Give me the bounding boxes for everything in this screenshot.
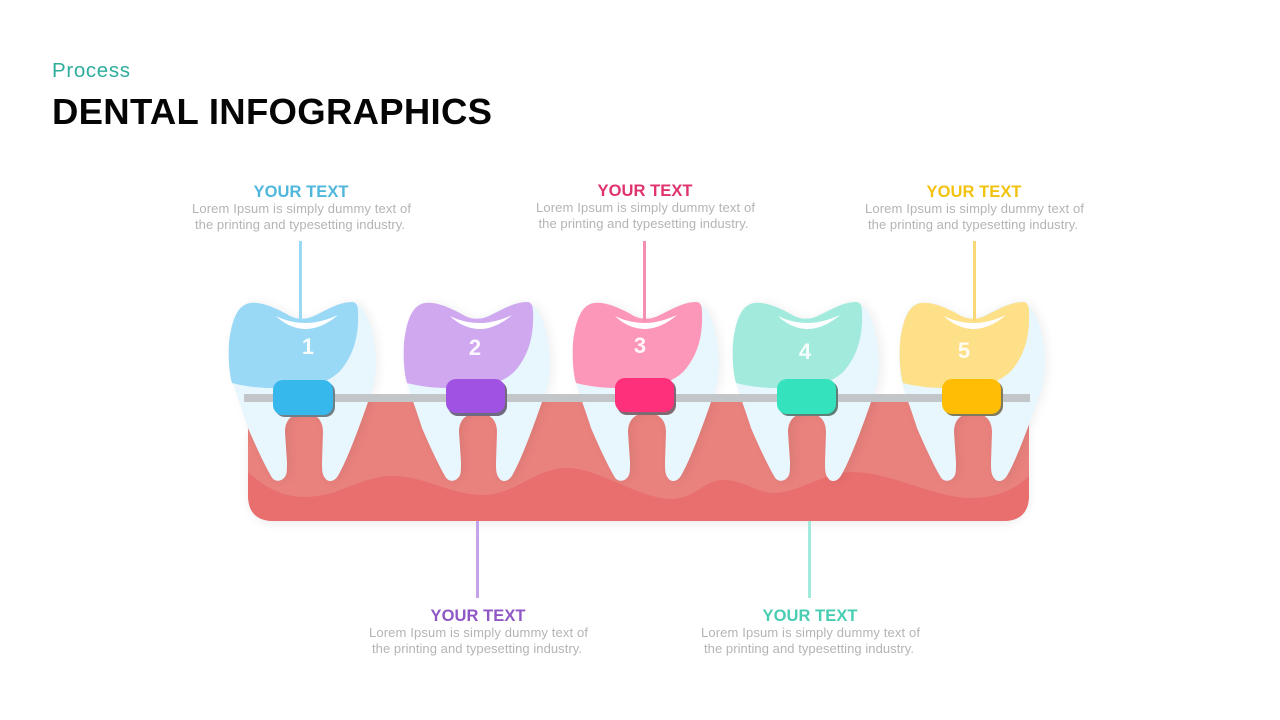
callout: top right: YOUR TEXT — [926, 183, 1022, 201]
callout: top middle — [536, 182, 755, 231]
callout: bottom right: Lorem Ipsum is simply dummy text of — [701, 625, 920, 640]
tooth 4 — [733, 302, 883, 481]
tooth 4: 4 — [799, 339, 812, 364]
bracket 4 — [777, 379, 838, 416]
tooth 5: 5 — [958, 338, 970, 363]
title: DENTAL INFOGRAPHICS — [52, 91, 492, 132]
tooth 1 — [229, 302, 379, 481]
callout: top left: YOUR TEXT — [254, 183, 348, 201]
callout: bottom left: the printing and typesetting industry. — [372, 641, 582, 656]
callout: top left: the printing and typesetting industry. — [195, 217, 405, 232]
tooth 1: 1 — [302, 334, 314, 359]
tooth 3: 3 — [634, 333, 646, 358]
bracket 3 — [615, 378, 676, 415]
wire — [244, 394, 1030, 402]
tooth 3 — [573, 302, 722, 481]
callout: bottom right: YOUR TEXT — [762, 607, 858, 625]
callout: bottom right — [701, 607, 920, 656]
connector 5 — [973, 241, 976, 321]
subtitle: Process — [52, 59, 130, 82]
tooth 2: 2 — [469, 335, 481, 360]
connector 4 — [808, 521, 811, 598]
callout: top middle: the printing and typesetting industry. — [538, 216, 748, 231]
callout: bottom left: YOUR TEXT — [430, 607, 526, 625]
tooth 2 — [404, 302, 553, 481]
callout: top left — [192, 183, 411, 232]
bracket 1 — [273, 380, 335, 417]
bracket 5 — [942, 379, 1003, 416]
callout: top right — [865, 183, 1084, 232]
callout: bottom right: the printing and typesetting industry. — [704, 641, 914, 656]
connector 2 — [476, 521, 479, 598]
connector 1 — [299, 241, 302, 320]
bracket 2 — [446, 379, 507, 416]
callout: bottom left — [369, 607, 588, 656]
callout: bottom left: Lorem Ipsum is simply dummy text of — [369, 625, 588, 640]
tooth 5 — [899, 302, 1048, 481]
gum — [248, 402, 1029, 521]
gum dark wave — [248, 468, 1029, 521]
callout: top middle: YOUR TEXT — [598, 182, 692, 200]
callout: top right: Lorem Ipsum is simply dummy text of — [865, 201, 1084, 216]
callout: top middle: Lorem Ipsum is simply dummy text of — [536, 200, 755, 215]
callout: top right: the printing and typesetting industry. — [868, 217, 1078, 232]
gum shadow — [248, 420, 1029, 524]
connector 3 — [643, 241, 646, 321]
callout: top left: Lorem Ipsum is simply dummy text of — [192, 201, 411, 216]
